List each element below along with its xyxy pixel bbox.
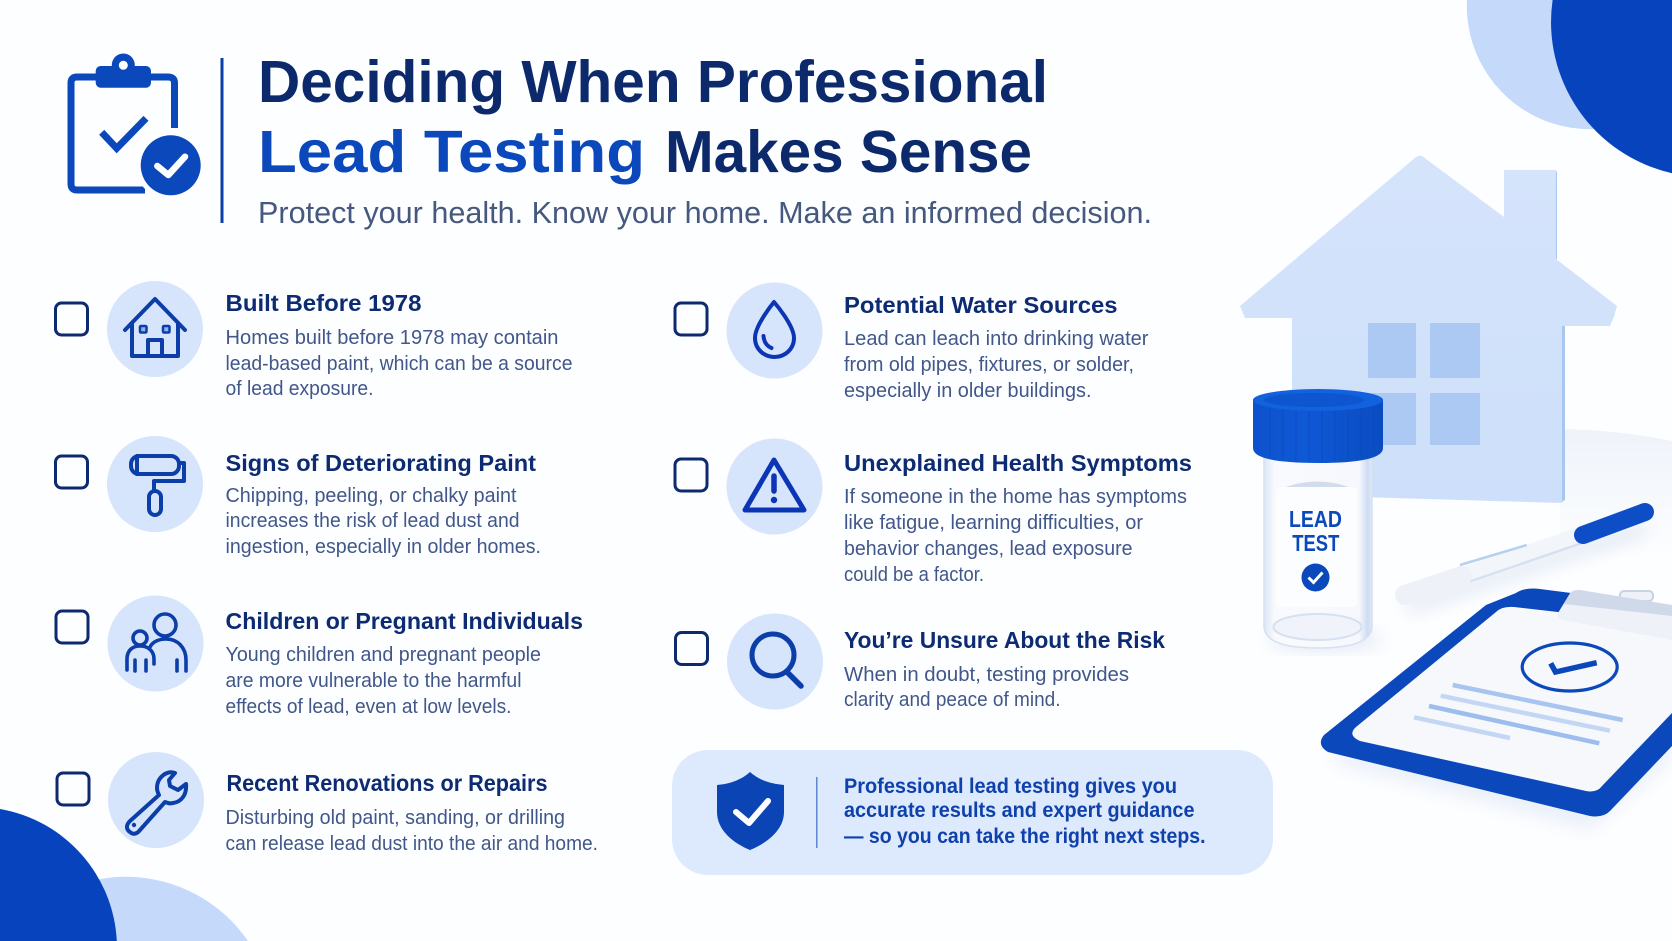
description: increases the risk of lead dust and [226, 509, 520, 532]
description: behavior changes, lead exposure [844, 537, 1132, 560]
description [226, 806, 598, 855]
description [844, 327, 1149, 402]
description [226, 643, 541, 718]
checkbox [56, 303, 88, 335]
callout divider [816, 777, 818, 848]
description: especially in older buildings. [844, 379, 1092, 402]
item: Children or Pregnant Individuals [56, 596, 583, 718]
house windows [1368, 323, 1480, 445]
item: Built Before 1978 [56, 281, 572, 400]
checkbox [56, 611, 88, 643]
icon: clipboard with check [71, 54, 206, 200]
illustration: clipboard [1321, 588, 1672, 830]
icon: wrench [108, 752, 204, 848]
title: Deciding When Professional [258, 49, 1048, 115]
item: You're Unsure About the Risk [676, 614, 1166, 711]
icon: water drop [726, 282, 822, 378]
illustration: swab [1405, 512, 1645, 606]
header divider [220, 58, 224, 223]
icon: house [107, 281, 203, 377]
illustration: specimen jar [1253, 389, 1383, 650]
callout [672, 750, 1273, 875]
illustration: model house [1240, 156, 1617, 503]
icon: shield with check [717, 772, 784, 850]
description: Disturbing old paint, sanding, or drilling [226, 806, 565, 829]
heading: Children or Pregnant Individuals [226, 608, 583, 634]
metal clip [1558, 590, 1672, 640]
callout text [844, 774, 1206, 848]
callout text: Professional lead testing gives you [844, 774, 1177, 798]
title: Lead Testing [258, 119, 645, 185]
description: If someone in the home has symptoms [844, 485, 1187, 508]
icon: adult and child [108, 596, 204, 692]
heading: Unexplained Health Symptoms [844, 450, 1192, 476]
description: of lead exposure. [226, 377, 374, 400]
callout text: — so you can take the right next steps. [844, 824, 1206, 848]
heading: Recent Renovations or Repairs [226, 770, 548, 796]
description: clarity and peace of mind. [844, 688, 1060, 711]
jar lid [1253, 399, 1383, 463]
description: effects of lead, even at low levels. [226, 695, 512, 718]
description: could be a factor. [844, 563, 984, 586]
description: Chipping, peeling, or chalky paint [226, 484, 517, 507]
callout text: accurate results and expert guidance [844, 798, 1195, 822]
description: Young children and pregnant people [226, 643, 541, 666]
decoration: bottom-left circles [0, 809, 248, 941]
description: Homes built before 1978 may contain [226, 326, 558, 349]
description: like fatigue, learning difficulties, or [844, 511, 1143, 534]
decoration: top-right circles [1467, 0, 1672, 173]
checkbox [675, 459, 707, 491]
description: ingestion, especially in older homes. [226, 535, 541, 558]
description: lead-based paint, which can be a source [226, 352, 572, 375]
icon: warning triangle [726, 438, 822, 534]
description: Lead can leach into drinking water [844, 327, 1149, 350]
heading: Signs of Deteriorating Paint [226, 450, 536, 476]
illustration: table surface [1560, 429, 1672, 560]
subtitle: Protect your health. Know your home. Make an informed decision. [258, 195, 1152, 230]
description [226, 326, 572, 400]
checkbox [675, 303, 707, 335]
description [226, 484, 541, 558]
heading: Potential Water Sources [844, 292, 1118, 318]
callout background [672, 750, 1273, 875]
item: Signs of Deteriorating Paint [56, 436, 541, 558]
jar label: LEAD [1289, 506, 1342, 532]
checkbox [57, 773, 89, 805]
description: When in doubt, testing provides [844, 663, 1129, 686]
title [258, 49, 1048, 185]
icon: magnifier [727, 614, 823, 710]
description [844, 663, 1129, 711]
jar label: TEST [1292, 530, 1339, 556]
item: Potential Water Sources [675, 282, 1149, 402]
description: can release lead dust into the air and home. [226, 832, 598, 855]
paper check circle [1522, 643, 1617, 691]
checkbox [56, 456, 88, 488]
description: from old pipes, fixtures, or solder, [844, 353, 1134, 376]
checkbox [676, 632, 708, 664]
description [844, 485, 1187, 586]
title: Makes Sense [665, 119, 1032, 185]
description: are more vulnerable to the harmful [226, 669, 522, 692]
heading: You’re Unsure About the Risk [844, 627, 1166, 653]
jar label [1276, 487, 1357, 607]
icon: paint roller [107, 436, 203, 532]
paper lines [1414, 685, 1623, 743]
item: Unexplained Health Symptoms [675, 438, 1192, 586]
item: Recent Renovations or Repairs [57, 752, 598, 855]
heading: Built Before 1978 [226, 290, 422, 316]
